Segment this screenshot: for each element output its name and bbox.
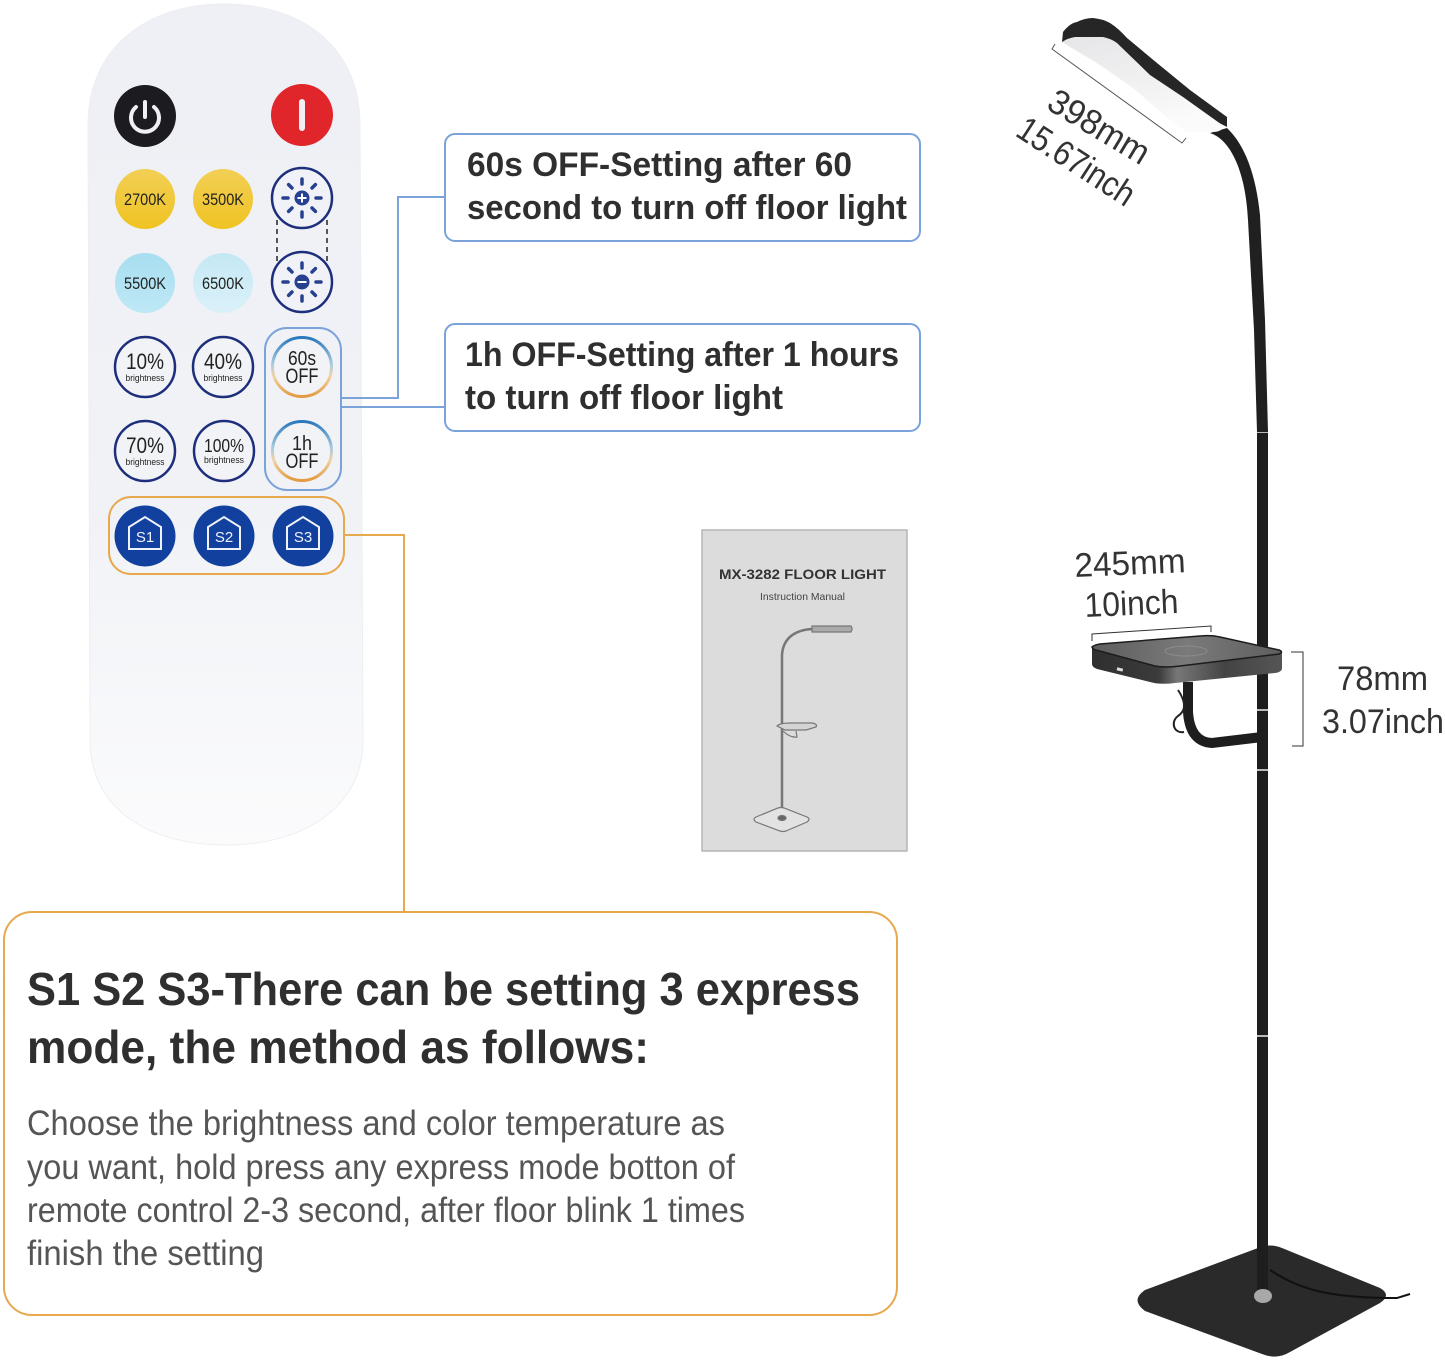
icon: red button (271, 84, 333, 146)
button: 5500K: 5500K (124, 274, 167, 293)
callout: 1h off: to turn off floor light (465, 379, 783, 417)
tray arm (1188, 682, 1262, 743)
connector: 60s callout (342, 197, 445, 398)
button: 10% brightness: brightness (126, 373, 165, 383)
label: tray height: 78mm (1337, 660, 1428, 698)
label: tray height (1322, 660, 1444, 741)
label: 398mm: 398mm (1041, 81, 1157, 173)
button: 6500K (193, 253, 253, 313)
button: 3500K: 3500K (202, 190, 245, 209)
button: S1 (114, 506, 176, 566)
button: S3: S3 (294, 529, 312, 546)
label: tray width: 245mm (1074, 542, 1186, 585)
button: 70% brightness: brightness (126, 457, 165, 467)
button: 70% brightness: 70% (126, 433, 164, 458)
base joint (1254, 1289, 1272, 1303)
connector: 1h callout (342, 406, 445, 408)
button: S2: S2 (215, 529, 233, 546)
panel body text: remote control 2-3 second, after floor blink 1 times (27, 1191, 745, 1230)
button: 10% brightness: 10% (126, 349, 164, 374)
button: 100% brightness (194, 421, 254, 481)
highlight: express mode buttons (109, 497, 344, 574)
button: 1h OFF: OFF (286, 450, 318, 473)
lamp base (1138, 1246, 1386, 1357)
dimension: tray height (1291, 652, 1303, 746)
lamp pole (1257, 430, 1268, 1292)
connector: express mode panel (345, 535, 404, 912)
power cable (1270, 1270, 1410, 1298)
button: 10% brightness (115, 337, 175, 397)
tray cable (1174, 690, 1184, 732)
button: 60s OFF: 60s (288, 348, 316, 370)
callout: 60s off: second to turn off floor light (467, 189, 907, 227)
button: 40% brightness (193, 337, 253, 397)
pole joints (1257, 432, 1268, 1036)
button: 70% brightness (115, 421, 175, 481)
label: tray width: 10inch (1084, 583, 1179, 625)
callout: 1h off (445, 324, 920, 431)
dashed link between brightness buttons (277, 220, 327, 262)
button: 40% brightness: brightness (204, 373, 243, 383)
panel body text: Choose the brightness and color temperature as (27, 1104, 725, 1143)
floor lamp (1010, 18, 1410, 1357)
button: 60s OFF: OFF (286, 365, 318, 388)
panel body text: finish the setting (27, 1234, 264, 1273)
button: S2 (194, 506, 254, 566)
button: 40% brightness: 40% (204, 349, 242, 374)
tray (1092, 636, 1282, 684)
icon: brightness up (272, 168, 332, 228)
button: 100% brightness: 100% (204, 436, 244, 456)
gooseneck (1210, 128, 1268, 432)
dimension: head length (1052, 44, 1186, 143)
button: 5500K (115, 253, 175, 313)
button: 2700K: 2700K (124, 190, 167, 209)
instruction manual: Instruction Manual (760, 591, 845, 603)
remote control (88, 4, 363, 845)
callout: 1h off: 1h OFF-Setting after 1 hours (465, 336, 899, 374)
manual lamp drawing (754, 626, 852, 832)
lamp head (1062, 18, 1227, 132)
dimension: tray width (1092, 626, 1211, 641)
button: 1h OFF: 1h (292, 433, 312, 455)
button: S1: S1 (136, 529, 154, 546)
label: tray width (1074, 542, 1186, 625)
instruction manual (702, 530, 907, 851)
panel heading: S1 S2 S3-There can be setting 3 express (27, 963, 860, 1015)
panel heading (27, 963, 860, 1073)
icon: brightness down (272, 252, 332, 312)
panel body text (27, 1104, 745, 1273)
icon: power button (114, 85, 176, 147)
remote body (88, 4, 363, 845)
button: 60s OFF (272, 338, 332, 396)
panel body text: you want, hold press any express mode botton of (27, 1148, 735, 1187)
button: S3 (272, 506, 334, 566)
highlight: timer buttons (265, 328, 341, 490)
button: 3500K (193, 169, 253, 229)
button: 1h OFF (272, 422, 332, 480)
panel: express mode instructions (4, 912, 897, 1315)
button: 100% brightness: brightness (204, 455, 244, 465)
callout: 60s off (445, 134, 920, 241)
button: 2700K (115, 169, 175, 229)
label: 15.67inch: 15.67inch (1010, 109, 1142, 214)
instruction manual: MX-3282 FLOOR LIGHT (719, 566, 886, 582)
callout: 60s off: 60s OFF-Setting after 60 (467, 146, 852, 184)
button: 6500K: 6500K (202, 274, 245, 293)
panel heading: mode, the method as follows: (27, 1021, 649, 1073)
